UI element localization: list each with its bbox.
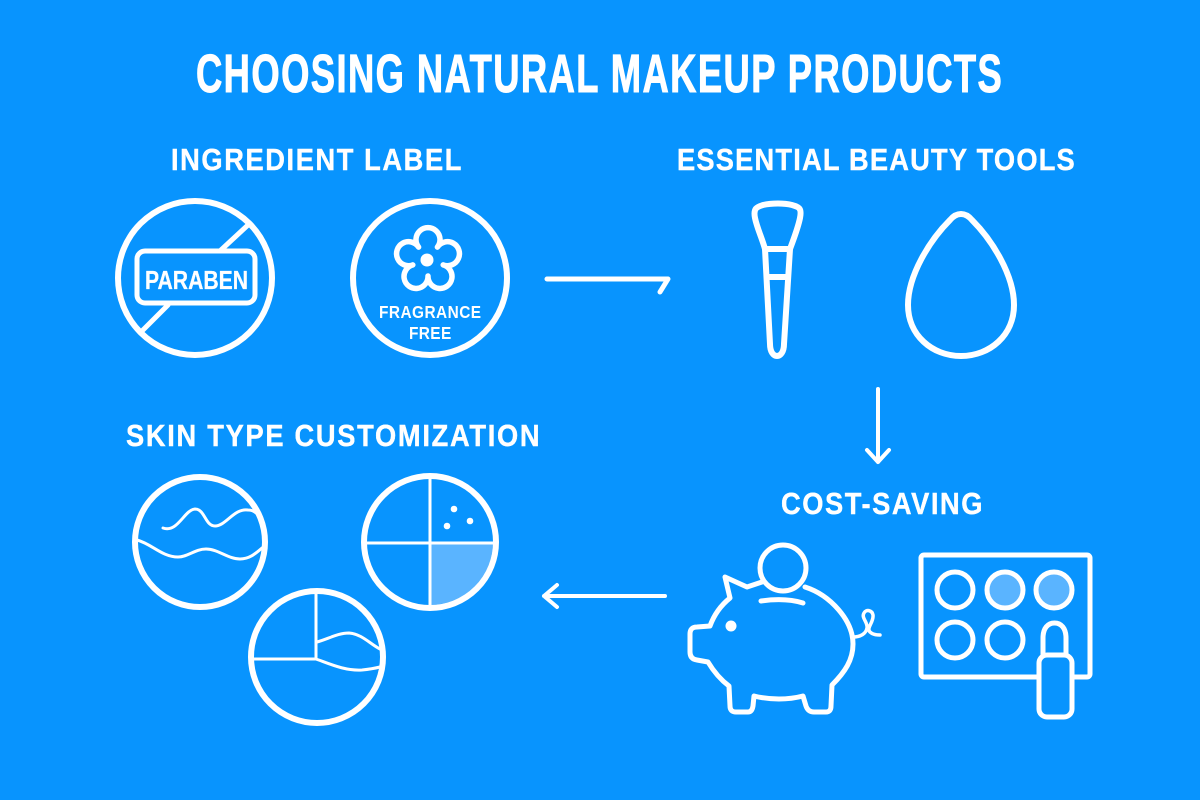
icon: combination skin circle: [251, 591, 383, 723]
icon: makeup brush: [754, 204, 801, 356]
icon: no paraben: [118, 201, 272, 355]
arrow: cost-saving to skin type: [544, 585, 665, 607]
icon: fragrance free: FREE: [409, 324, 451, 343]
icon: skin circle with waves: [135, 477, 265, 607]
icon: eyeshadow palette and lipstick: [921, 555, 1090, 717]
heading: ingredient label: INGREDIENT LABEL: [171, 143, 461, 177]
title: CHOOSING NATURAL MAKEUP PRODUCTS: [196, 44, 1002, 104]
heading: essential beauty tools: ESSENTIAL BEAUTY TOOLS: [677, 143, 1075, 177]
icon: piggy bank: [690, 545, 880, 712]
icon: skin circle with quadrants: [364, 476, 496, 608]
heading: cost-saving: COST-SAVING: [781, 487, 983, 521]
icon: fragrance free: [353, 201, 507, 355]
icon: fragrance free: FRAGRANCE: [379, 303, 481, 322]
icon: beauty sponge: [908, 214, 1014, 356]
arrow: tools to cost-saving: [867, 389, 889, 462]
arrow: label to tools: [547, 279, 668, 292]
heading: skin type customization: SKIN TYPE CUSTOMIZATION: [126, 419, 540, 453]
icon: no paraben: PARABEN: [145, 265, 248, 295]
